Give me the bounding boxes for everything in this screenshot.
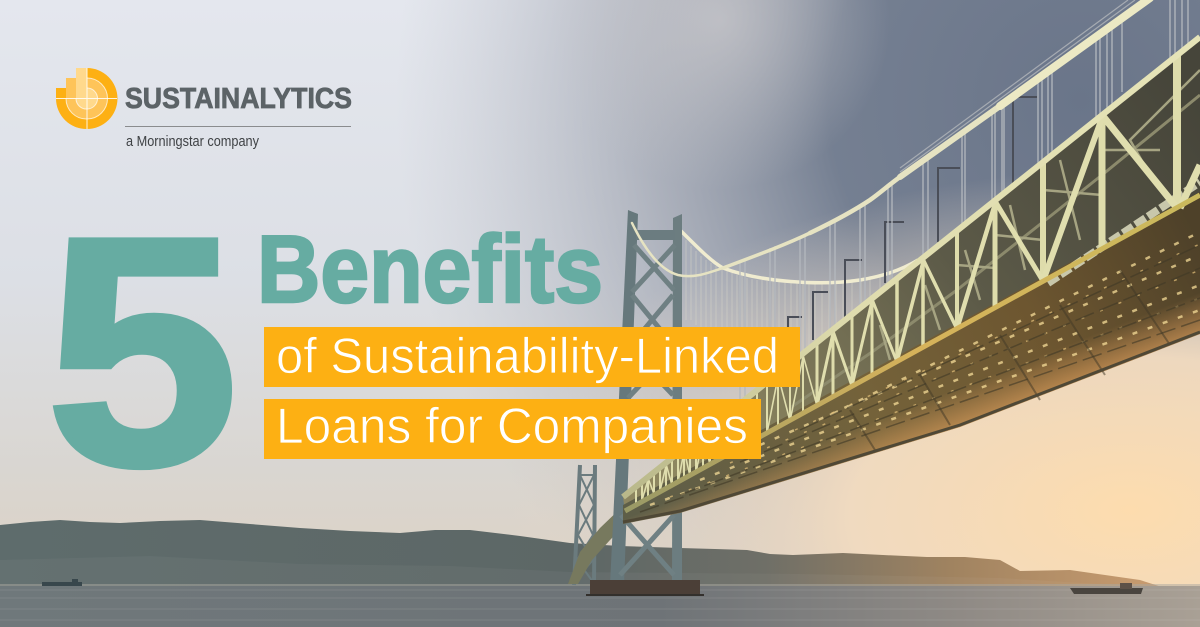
main tower: [610, 210, 682, 585]
numeral 5: 5: [46, 171, 238, 534]
ships: [42, 579, 1143, 594]
logo wordmark: SUSTAINALYTICS: [125, 83, 352, 115]
suspension cable thin strands: [900, 0, 1135, 172]
suspender ropes far: [686, 240, 905, 385]
subtitle banner line 1: of Sustainability-Linked: [276, 328, 779, 384]
interior floor beams and back truss: [790, 70, 1200, 408]
lamp posts: [788, 97, 1037, 360]
walkway behind truss: [1048, 182, 1200, 283]
far bridge deck curving to shore: [568, 505, 628, 584]
water: [0, 584, 1200, 627]
deck underside: [623, 192, 1200, 524]
subtitle banner line 2: Loans for Companies: [276, 398, 748, 454]
truss diagonals: [642, 115, 1200, 500]
side-span far cable: [678, 228, 918, 283]
heading: Benefits: Benefits: [257, 216, 603, 323]
tower base pier: [586, 580, 704, 596]
truss interior: [623, 37, 1200, 511]
logo tagline: a Morningstar company: [126, 134, 260, 150]
distant hills: [0, 520, 1165, 588]
near main cable suspenders: [740, 0, 1188, 400]
far tower: [574, 465, 596, 585]
truss top chord: [623, 37, 1200, 497]
truss verticals: [636, 55, 1177, 504]
logo mark: [56, 68, 117, 129]
main near cable: [632, 0, 1150, 276]
company logo: [56, 68, 352, 150]
truss bottom chord: [625, 195, 1200, 511]
